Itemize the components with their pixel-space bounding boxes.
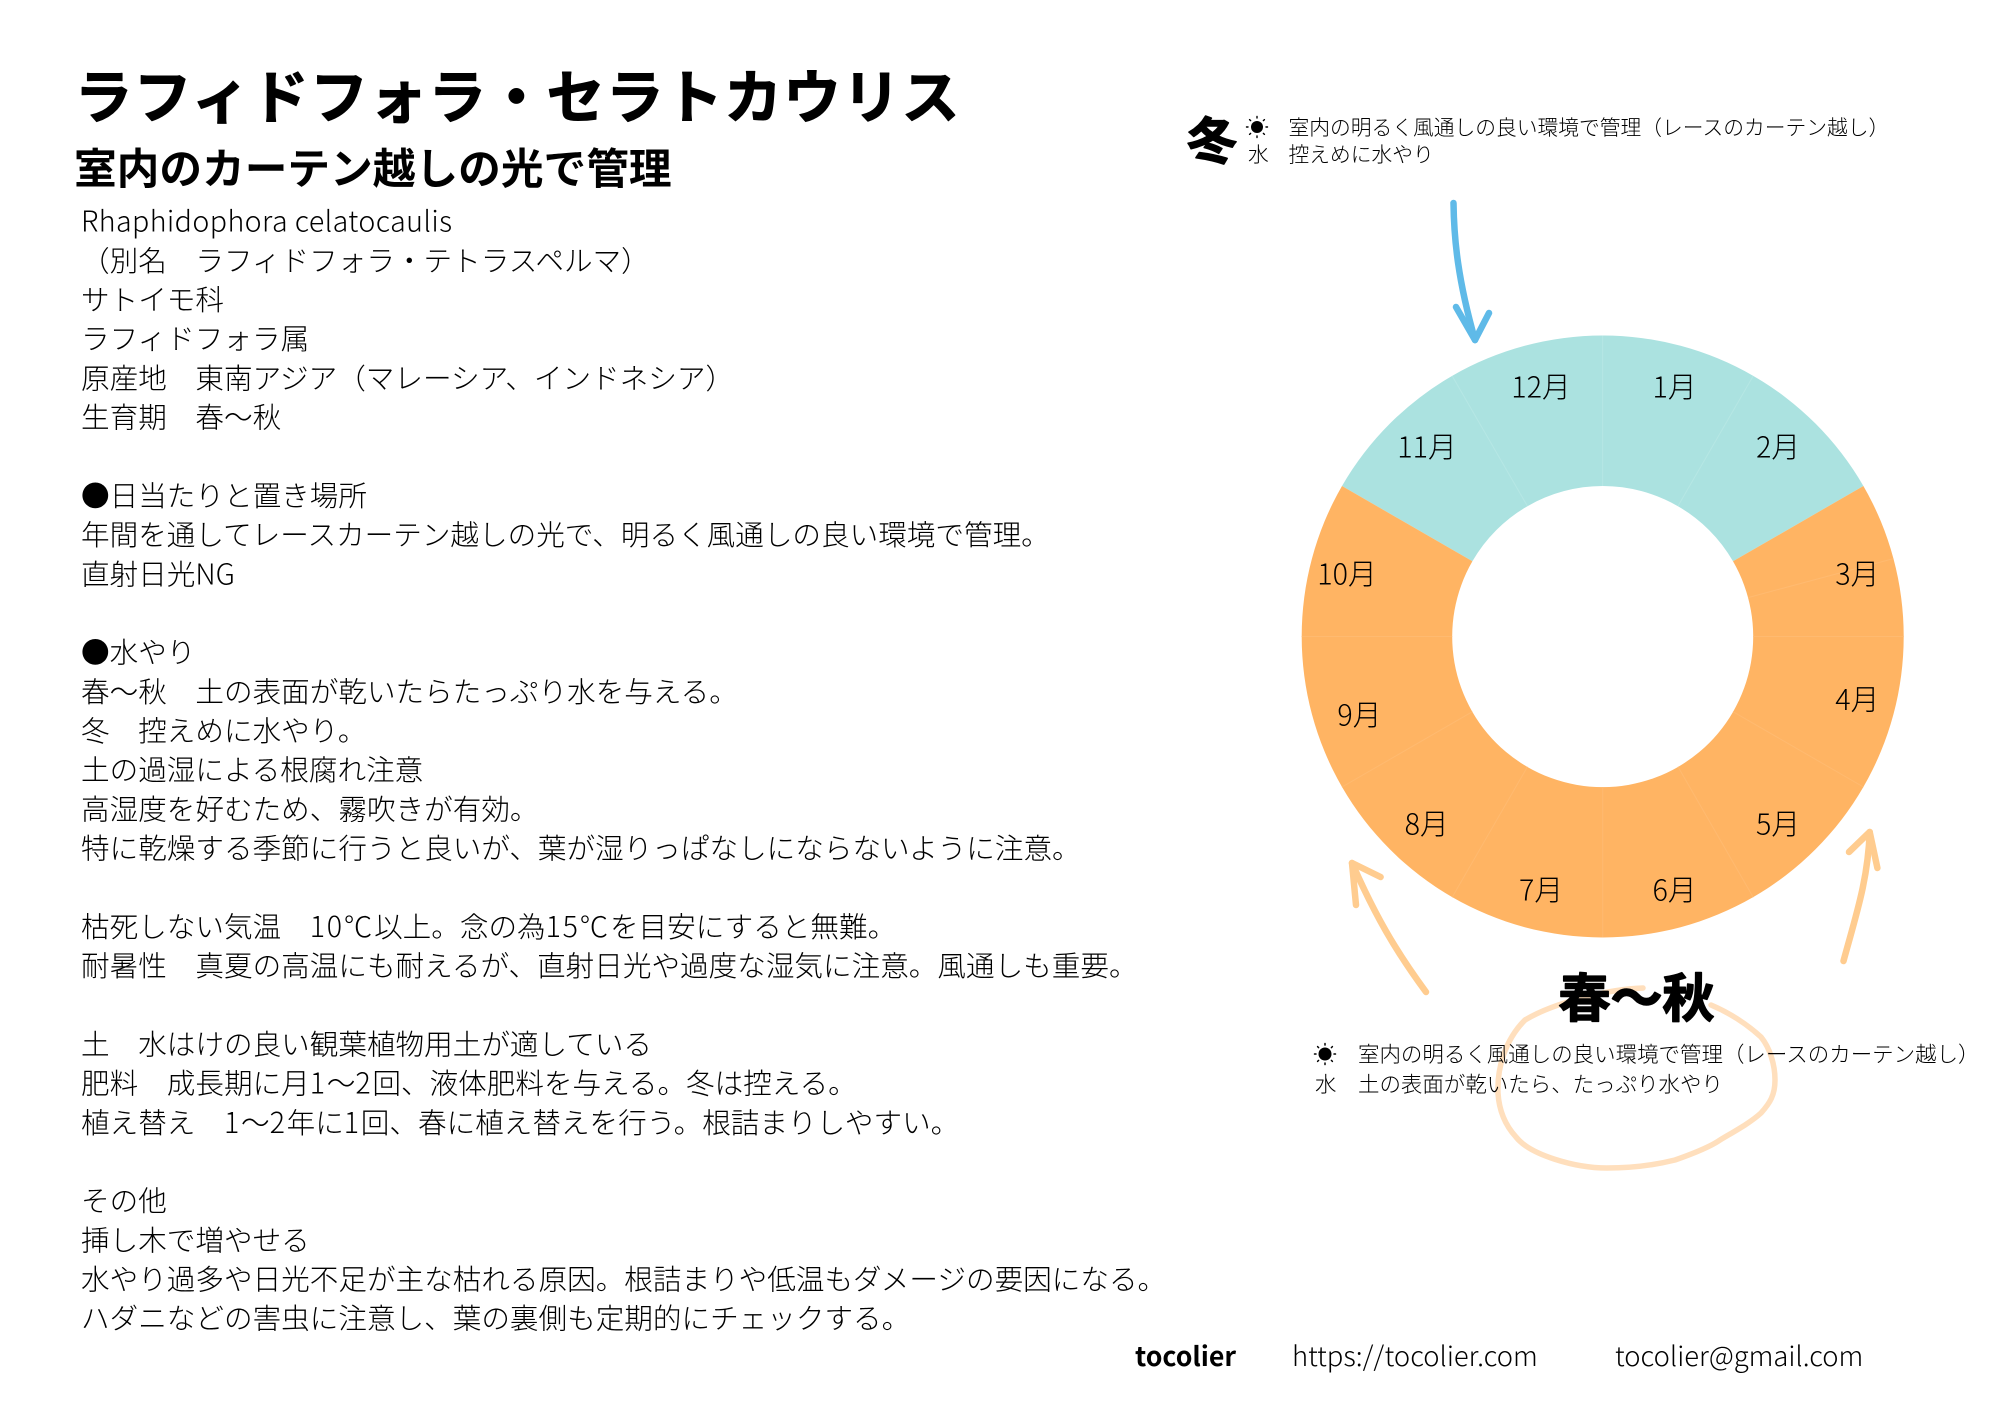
text block: other notes: 水やり過多や日光不足が主な枯れる原因。根詰まりや低温もダメージの要因になる。 <box>81 1258 1166 1298</box>
text block: species profile: 原産地 東南アジア（マレーシア、インドネシア） <box>81 356 734 397</box>
title: ラフィドフォラ・セラトカウリス <box>74 51 960 135</box>
month labels: 2月 <box>1756 426 1800 466</box>
hand-drawn circle <box>1498 988 1775 1168</box>
winter care notes <box>1246 111 1889 168</box>
text block: species profile: ラフィドフォラ属 <box>81 317 309 358</box>
arrow: spring-autumn right <box>1844 832 1877 961</box>
text block: light and placement: ●日当たりと置き場所 <box>81 474 367 515</box>
text block: species profile: Rhaphidophora celatocaulis <box>81 200 452 241</box>
month labels: 10月 <box>1317 552 1377 594</box>
footer: brand and contact: tocolier <box>1135 1335 1236 1374</box>
donut chart: months by season <box>1302 336 1904 938</box>
text block: species profile: 生育期 春～秋 <box>81 396 281 437</box>
month labels: 12月 <box>1511 366 1571 406</box>
text block: light and placement <box>81 474 1050 593</box>
text block: temperature <box>81 905 1138 985</box>
icon: winter sun <box>1246 116 1268 138</box>
winter care notes: 水 <box>1248 138 1269 168</box>
month labels: 7月 <box>1519 868 1563 910</box>
text block: species profile: （別名 ラフィドフォラ・テトラスペルマ） <box>81 239 650 280</box>
month labels: 5月 <box>1756 802 1800 844</box>
text block: soil and care: 土 水はけの良い観葉植物用土が適している <box>81 1022 652 1064</box>
footer: brand and contact <box>1135 1334 1863 1374</box>
text block: watering: 冬 控えめに水やり。 <box>81 709 366 750</box>
text block: temperature: 枯死しない気温 10℃以上。念の為15℃を目安にすると無難。 <box>81 905 896 946</box>
text block: light and placement: 年間を通してレースカーテン越しの光で、明るく風通しの良い環境で管理。 <box>81 513 1050 554</box>
month labels: 1月 <box>1652 366 1697 406</box>
icon: spring-autumn sun <box>1314 1044 1336 1064</box>
text block: species profile <box>81 200 734 437</box>
text block: other notes: 挿し木で増やせる <box>81 1218 310 1259</box>
text block: watering: 土の過湿による根腐れ注意 <box>81 748 423 789</box>
winter care notes: 控えめに水やり <box>1288 138 1434 168</box>
text block: light and placement: 直射日光NG <box>81 552 235 593</box>
subtitle: 室内のカーテン越しの光で管理 <box>74 135 672 197</box>
spring-autumn care notes: 室内の明るく風通しの良い環境で管理（レースのカーテン越し） <box>1358 1038 1980 1069</box>
spring-autumn heading: 春～秋 <box>1558 957 1715 1032</box>
winter heading: 冬 <box>1187 102 1237 174</box>
arrow: winter to donut <box>1454 203 1489 340</box>
arrow: spring-autumn left <box>1352 863 1426 992</box>
footer: brand and contact: tocolier@gmail.com <box>1615 1334 1863 1374</box>
month labels <box>1317 366 1879 910</box>
text block: watering: 高湿度を好むため、霧吹きが有効。 <box>81 787 539 828</box>
month labels: 4月 <box>1835 678 1879 719</box>
text block: species profile: サトイモ科 <box>81 278 224 319</box>
text block: watering: 春～秋 土の表面が乾いたらたっぷり水を与える。 <box>81 670 738 711</box>
month labels: 8月 <box>1405 802 1449 844</box>
text block: soil and care: 肥料 成長期に月1～2回、液体肥料を与える。冬は控える。 <box>81 1062 857 1103</box>
text block: other notes: ハダニなどの害虫に注意し、葉の裏側も定期的にチェックする。 <box>81 1297 910 1338</box>
text block: soil and care <box>81 1022 959 1142</box>
month labels: 3月 <box>1835 552 1879 594</box>
month labels: 11月 <box>1397 426 1457 466</box>
text block: watering: 特に乾燥する季節に行うと良いが、葉が湿りっぱなしにならないように注意。 <box>81 827 1081 868</box>
spring-autumn care notes <box>1314 1038 1980 1099</box>
text block: soil and care: 植え替え 1～2年に1回、春に植え替えを行う。根詰まりしやすい。 <box>81 1101 959 1142</box>
growing season segments <box>1302 486 1904 937</box>
text block: temperature: 耐暑性 真夏の高温にも耐えるが、直射日光や過度な湿気に注意。風通しも重要。 <box>81 944 1138 985</box>
winter care notes: 室内の明るく風通しの良い環境で管理（レースのカーテン越し） <box>1288 111 1889 141</box>
text block: watering: ●水やり <box>81 631 195 672</box>
month labels: 6月 <box>1652 868 1697 910</box>
text block: other notes <box>81 1179 1166 1338</box>
winter segments <box>1603 336 1863 561</box>
footer: brand and contact: https://tocolier.com <box>1292 1334 1538 1374</box>
month labels: 9月 <box>1337 694 1381 734</box>
text block: other notes: その他 <box>81 1179 167 1220</box>
spring-autumn care notes: 水 <box>1315 1068 1336 1099</box>
text block: watering <box>81 631 1081 868</box>
spring-autumn care notes: 土の表面が乾いたら、たっぷり水やり <box>1358 1068 1723 1099</box>
